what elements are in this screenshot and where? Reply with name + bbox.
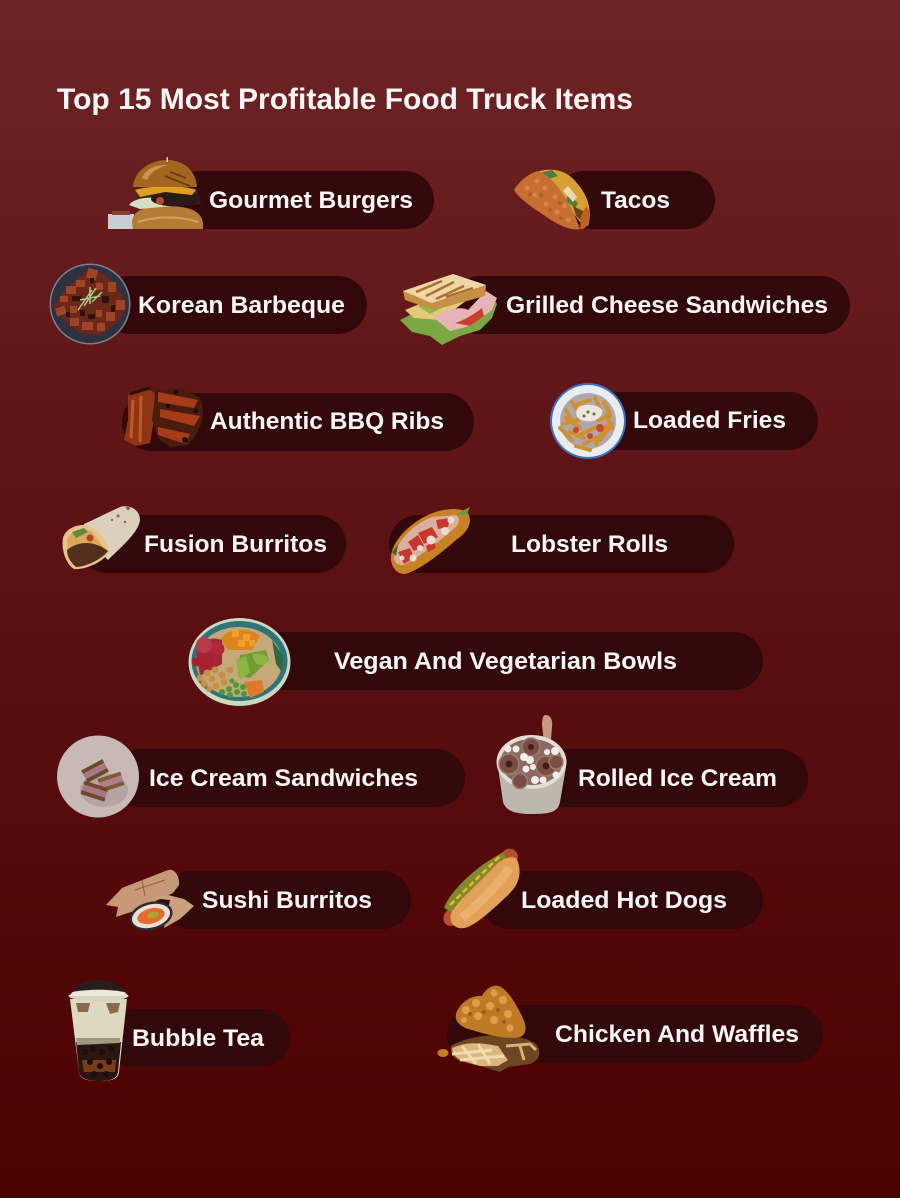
pill (105, 1009, 290, 1067)
pill (450, 276, 850, 334)
pill (250, 632, 763, 690)
icon: vegan bowl (188, 618, 290, 706)
pill (389, 515, 734, 573)
label: Tacos (601, 187, 670, 214)
pill (110, 749, 465, 807)
label: Korean Barbeque (138, 292, 345, 319)
pill (480, 871, 763, 929)
icon: ribs (124, 388, 203, 447)
item: Fusion Burritos (63, 506, 346, 573)
icon: sushi burrito (106, 870, 194, 935)
title: Top 15 Most Profitable Food Truck Items (57, 83, 633, 116)
icon: burger (108, 157, 203, 229)
item: Ice Cream Sandwiches (57, 736, 465, 818)
label: Fusion Burritos (144, 531, 327, 558)
label: Gourmet Burgers (209, 187, 413, 214)
label: Authentic BBQ Ribs (210, 408, 444, 435)
icon: hot dog (443, 849, 520, 928)
item: Rolled Ice Cream (496, 715, 808, 814)
item: Authentic BBQ Ribs (122, 388, 474, 451)
pill (78, 515, 346, 573)
label: Loaded Fries (633, 407, 786, 434)
label: Sushi Burritos (202, 887, 372, 914)
pill (585, 392, 818, 450)
icon: sandwich (400, 274, 497, 345)
item: Gourmet Burgers (108, 157, 434, 229)
pill (100, 276, 367, 334)
icon: Korean barbeque plate (50, 264, 130, 344)
icon: burrito (63, 506, 140, 569)
item: Vegan And Vegetarian Bowls (188, 618, 763, 706)
label: Bubble Tea (132, 1025, 265, 1052)
label: Lobster Rolls (511, 531, 668, 558)
label: Chicken And Waffles (555, 1021, 799, 1048)
icon: lobster roll (391, 507, 470, 574)
icon: rolled ice cream cup (496, 715, 566, 814)
pill (122, 393, 474, 451)
item: Grilled Cheese Sandwiches (400, 274, 850, 345)
pill (530, 749, 808, 807)
pill (160, 871, 411, 929)
label: Rolled Ice Cream (578, 765, 777, 792)
item: Bubble Tea (68, 980, 290, 1081)
item: Lobster Rolls (389, 507, 734, 574)
item: Loaded Hot Dogs (443, 849, 763, 929)
icon: chicken and waffles (438, 986, 539, 1072)
pill (170, 171, 434, 229)
item: Tacos (514, 170, 715, 229)
pill (447, 1005, 823, 1063)
item: Sushi Burritos (106, 870, 411, 935)
label: Grilled Cheese Sandwiches (506, 292, 828, 319)
icon: loaded fries plate (550, 383, 626, 459)
item: Loaded Fries (550, 383, 818, 459)
item: Chicken And Waffles (438, 986, 823, 1072)
icon: ice cream sandwich plate (57, 736, 139, 818)
pill (555, 171, 715, 229)
label: Ice Cream Sandwiches (149, 765, 418, 792)
icon: taco (514, 170, 590, 229)
label: Loaded Hot Dogs (521, 887, 727, 914)
icon: bubble tea cup (68, 980, 128, 1081)
label: Vegan And Vegetarian Bowls (334, 648, 677, 675)
item: Korean Barbeque (50, 264, 367, 344)
